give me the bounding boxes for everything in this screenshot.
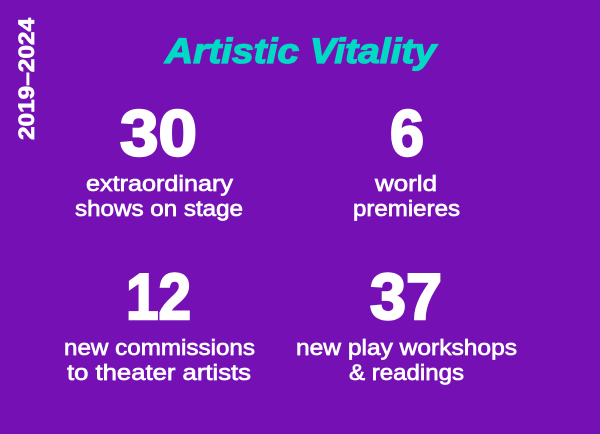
- label: new play workshops and readings: & readings: [349, 360, 464, 385]
- label: new play workshops and readings: [296, 335, 517, 385]
- label: new play workshops and readings: new play workshops: [296, 335, 517, 360]
- label: new commissions to theater artists: [64, 335, 255, 385]
- number: 6: 6: [390, 96, 424, 170]
- label: extraordinary shows on stage: shows on stage: [75, 196, 243, 221]
- stat: 37 new play workshops and readings: [296, 260, 517, 385]
- label: extraordinary shows on stage: extraordinary: [86, 171, 233, 196]
- label: world premieres: [353, 171, 460, 221]
- label: world premieres: world: [374, 171, 437, 196]
- date range, vertical: 2019–2024: [14, 17, 39, 140]
- label: new commissions to theater artists: to theater artists: [67, 360, 251, 385]
- number: 12: 12: [126, 260, 191, 333]
- label: world premieres: premieres: [353, 196, 460, 221]
- number: 37: 37: [370, 260, 442, 333]
- label: new commissions to theater artists: new commissions: [64, 335, 255, 360]
- title: Artistic Vitality: [164, 32, 438, 71]
- stat: 12 new commissions to theater artists: [64, 260, 255, 385]
- stat: 6 world premieres: [353, 96, 460, 221]
- label: extraordinary shows on stage: [75, 171, 243, 221]
- number: 30: 30: [120, 96, 197, 170]
- stat: 30 extraordinary shows on stage: [75, 96, 243, 221]
